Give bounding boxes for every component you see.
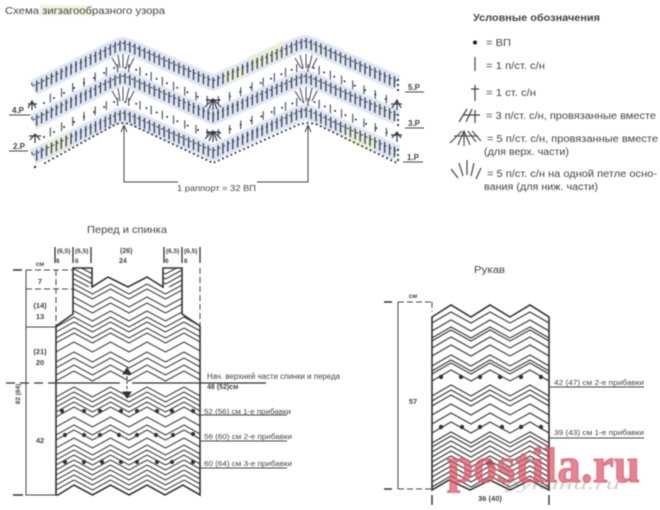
legend: five in one (451, 160, 657, 193)
increase dots (60, 409, 195, 464)
title: pattern chart: Схема зигзагообразного узора (5, 5, 165, 17)
panel: sleeve schematic (430, 304, 551, 492)
legend: chain stitch: = ВП (486, 38, 511, 49)
callouts: front and back measures (200, 372, 341, 468)
dimensions: width labels: (6,5) (57, 248, 70, 255)
dimensions: width labels (55, 247, 200, 265)
callouts: front and back measures: Нач. верхней части спинки и переда (207, 372, 341, 381)
watermark: postila.ru: postila.ru (447, 437, 640, 493)
dimensions: height scale: 42 (36, 436, 44, 445)
legend: double crochet (471, 85, 536, 101)
dimensions: height scale: (14) (33, 301, 47, 310)
callouts: front and back measures: 56 (60) см 2-е прибавки (204, 432, 292, 441)
heading: front and back: Перед и спинка (87, 224, 167, 236)
dimensions: height scale: 7 (38, 277, 42, 286)
tinted spots (45, 48, 375, 150)
foundation chain (45, 123, 397, 163)
dimensions: sleeve: 57 (409, 397, 417, 406)
fans (112, 54, 317, 101)
dimensions: sleeve (384, 293, 549, 505)
dimensions: height scale: 20 (36, 358, 44, 367)
legend: double crochet: = 1 ст. с/н (486, 88, 536, 99)
row labels: 2.Р (13, 142, 26, 151)
legend: three together: = 3 п/ст. с/н, провязанные вместе (486, 111, 656, 122)
legend: half double: = 1 п/ст. с/н (486, 61, 545, 72)
legend: five in one: = 5 п/ст. с/н на одной петле осно- (487, 169, 657, 180)
row 3 double crochet (33, 78, 397, 122)
dimensions: width labels: (6,5) (184, 248, 197, 255)
dimensions: sleeve: см (409, 293, 417, 300)
callouts: front and back measures: 60 (64) см 3-е прибавки (204, 459, 292, 468)
dimensions: height scale: 82 (84) (15, 384, 22, 404)
legend (450, 12, 658, 193)
dimensions: width labels: (26) (120, 248, 132, 255)
waist arrows (123, 368, 131, 398)
callouts: front and back measures: 52 (56) см 1-е прибавки (204, 407, 291, 416)
outline (432, 305, 549, 490)
row 1 double crochet (33, 112, 397, 157)
row 4 half-double stitches (42, 68, 388, 136)
dimensions: sleeve: 36 (40) (478, 494, 502, 503)
chain dots in rows 2 and 4 (44, 68, 388, 137)
legend: chain stitch (473, 38, 511, 49)
decrease clusters (28, 99, 402, 143)
zigzag stitch chart (28, 41, 402, 168)
zigzag lines (432, 310, 549, 488)
dimensions: height scale: 13 (36, 312, 44, 321)
dimensions: width labels: 24 (119, 258, 127, 265)
dimensions: height scale: см (36, 261, 44, 268)
repeat bracket arrows (121, 125, 311, 193)
dimensions: width labels: (6,5) (166, 248, 179, 255)
row labels: 1.Р (407, 153, 420, 162)
legend: five together: (для верх. части) (484, 147, 569, 158)
dimensions: height scale: (21) (33, 347, 47, 356)
legend: five together (450, 131, 658, 158)
centre mark (486, 458, 494, 465)
zigzag lines (56, 282, 200, 492)
dimensions: height scale (13, 261, 200, 495)
heading: sleeve: Рукав (474, 264, 505, 276)
dimensions: width labels: 6 (184, 258, 188, 265)
callouts: front and back measures: 48 (52)см (207, 384, 238, 391)
repeat bracket arrows: 1 раппорт = 32 ВП (177, 183, 256, 193)
waist line (6, 382, 56, 384)
legend title: Условные обозначения (473, 12, 600, 24)
callouts: sleeve measures: 39 (43) см 1-е прибавки (554, 428, 644, 437)
shoulder hatching (73, 268, 182, 288)
row labels: 4.Р (12, 106, 25, 115)
dimensions: width labels: (6,5) (75, 248, 88, 255)
legend: half double (475, 57, 545, 72)
dimensions: width labels: 6 (75, 258, 79, 265)
panel: front and back schematic (6, 264, 266, 495)
crossbars (33, 41, 397, 155)
outline (56, 268, 200, 495)
dimensions: width labels: 6 (56, 258, 60, 265)
callouts: sleeve measures: 42 (47) см 2-е прибавки (554, 378, 644, 387)
watermark: grey: рукани.ru (503, 476, 620, 493)
row labels: 5.Р (408, 83, 421, 92)
increase dots (439, 375, 543, 429)
row labels (9, 83, 424, 162)
legend: three together (459, 109, 656, 123)
legend: five together: = 5 п/ст. с/н, провязанные вместе (487, 134, 658, 145)
callouts: sleeve measures (549, 378, 644, 438)
legend: five in one: вания (для ниж. части) (484, 182, 598, 193)
row labels: 3.Р (408, 119, 421, 128)
row bands (33, 43, 397, 157)
dimensions: width labels: 6 (165, 258, 169, 265)
row 5 double crochet (33, 43, 397, 88)
